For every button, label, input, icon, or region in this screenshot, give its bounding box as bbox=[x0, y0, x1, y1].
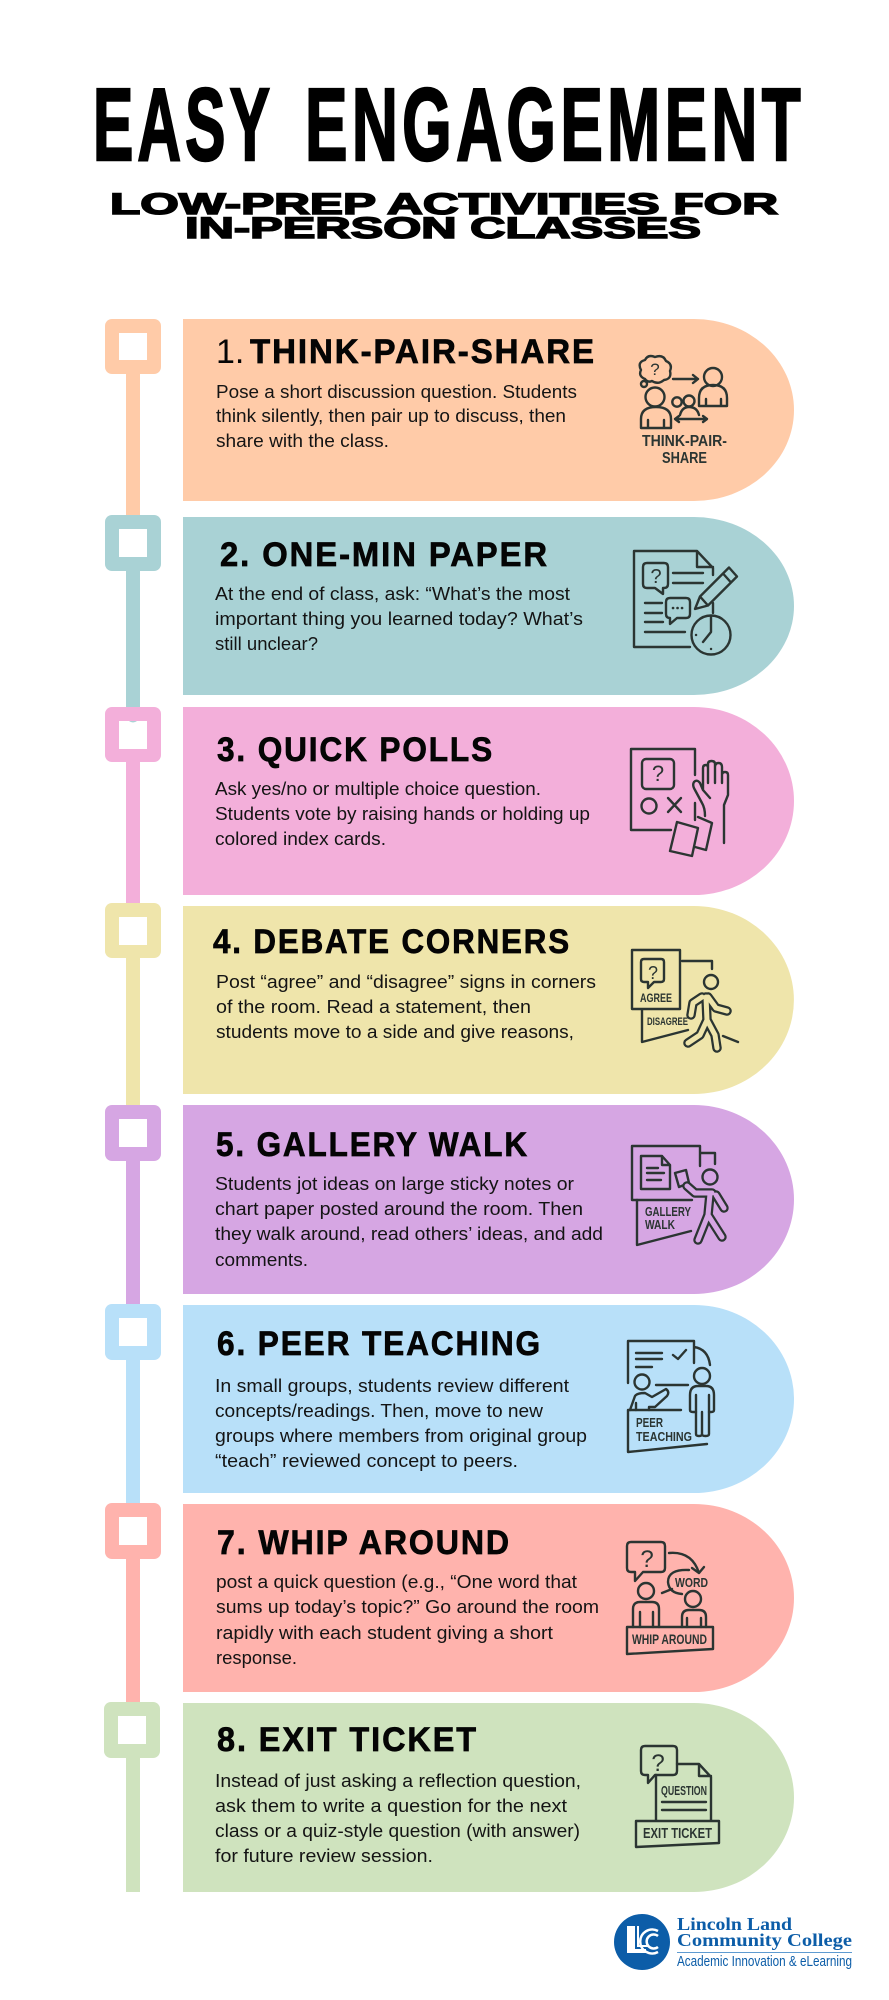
heading: 4. DEBATE CORNERS bbox=[213, 923, 571, 961]
icon: agree disagree signs with walker: AGREE bbox=[640, 991, 672, 1005]
college name: Lincoln Land bbox=[677, 1914, 792, 1934]
timeline node 4 bbox=[105, 903, 161, 1108]
timeline node 6 bbox=[105, 1304, 161, 1506]
heading: 8. EXIT TICKET bbox=[217, 1721, 478, 1759]
description: important thing you learned today? What’s bbox=[215, 608, 583, 629]
icon: gallery walk: WALK bbox=[645, 1217, 675, 1232]
icon: gallery walk bbox=[632, 1146, 724, 1245]
description: concepts/readings. Then, move to new bbox=[215, 1400, 544, 1421]
title: EASY bbox=[93, 67, 274, 182]
logo mark bbox=[614, 1914, 670, 1970]
description: comments. bbox=[215, 1249, 308, 1270]
description: students move to a side and give reasons, bbox=[216, 1021, 574, 1042]
timeline node 8 bbox=[104, 1702, 160, 1892]
heading: 7. WHIP AROUND bbox=[217, 1524, 511, 1562]
panel background bbox=[183, 906, 794, 1094]
title bbox=[93, 67, 805, 182]
description: Students vote by raising hands or holding up bbox=[215, 803, 590, 824]
department name: Academic Innovation & eLearning bbox=[677, 1954, 852, 1970]
panel 7: whip around bbox=[183, 1504, 794, 1692]
description: At the end of class, ask: “What’s the most bbox=[215, 583, 570, 604]
subtitle: LOW-PREP ACTIVITIES FOR bbox=[110, 188, 779, 221]
icon: voting hand and cards bbox=[631, 749, 728, 856]
description: Instead of just asking a reflection question, bbox=[215, 1770, 581, 1791]
description: sums up today’s topic?” Go around the room bbox=[216, 1596, 599, 1617]
description bbox=[216, 1571, 599, 1668]
description: ask them to write a question for the next bbox=[215, 1795, 567, 1816]
panel background bbox=[183, 1305, 794, 1493]
description: “teach” reviewed concept to peers. bbox=[215, 1450, 518, 1471]
icon: agree disagree signs with walker: DISAGREE bbox=[647, 1016, 688, 1028]
description: Ask yes/no or multiple choice question. bbox=[215, 778, 541, 799]
icon: paper with pencil and clock bbox=[634, 551, 737, 654]
heading: 3. QUICK POLLS bbox=[217, 731, 494, 769]
description: colored index cards. bbox=[215, 828, 386, 849]
panel background bbox=[183, 1703, 794, 1892]
icon: paper with pencil and clock: ? bbox=[650, 566, 662, 588]
subtitle: IN-PERSON CLASSES bbox=[185, 212, 701, 245]
icon: think-pair-share: THINK-PAIR- bbox=[642, 433, 727, 450]
timeline node 1 bbox=[105, 319, 161, 518]
icon: agree disagree signs with walker bbox=[632, 950, 738, 1048]
panel 6: peer teaching bbox=[183, 1305, 794, 1493]
heading text: THINK-PAIR-SHARE bbox=[250, 333, 596, 371]
description bbox=[215, 1770, 581, 1866]
description: rapidly with each student giving a short bbox=[216, 1622, 553, 1643]
description: In small groups, students review different bbox=[215, 1375, 569, 1396]
panel 8: exit ticket bbox=[183, 1703, 794, 1892]
icon: voting hand and cards: ? bbox=[652, 761, 664, 786]
description: for future review session. bbox=[215, 1845, 433, 1866]
description bbox=[215, 1375, 587, 1471]
timeline node 2 bbox=[105, 515, 161, 714]
description: response. bbox=[216, 1647, 297, 1668]
icon: think-pair-share: ? bbox=[650, 360, 660, 379]
description bbox=[216, 381, 577, 451]
panel background bbox=[183, 707, 794, 895]
icon: gallery walk: GALLERY bbox=[645, 1204, 691, 1219]
timeline node 7 bbox=[105, 1503, 161, 1705]
description: they walk around, read others’ ideas, and add bbox=[215, 1223, 603, 1244]
icon: whip around: WORD bbox=[675, 1575, 708, 1590]
logo: Lincoln Land Community College bbox=[614, 1914, 852, 1970]
description: chart paper posted around the room. Then bbox=[215, 1198, 583, 1219]
timeline node 5 bbox=[105, 1105, 161, 1307]
heading: 2. ONE-MIN PAPER bbox=[220, 536, 549, 574]
timeline node 3 bbox=[105, 707, 161, 906]
panel 5: gallery walk bbox=[183, 1105, 794, 1294]
panel background bbox=[183, 319, 794, 501]
icon: exit ticket: ? bbox=[651, 1750, 665, 1777]
panel 3: quick polls bbox=[183, 707, 794, 895]
description bbox=[215, 1173, 603, 1270]
panel background bbox=[183, 517, 794, 695]
panel 4: debate corners bbox=[183, 906, 794, 1094]
icon: peer teaching: TEACHING bbox=[636, 1429, 692, 1444]
description: groups where members from original group bbox=[215, 1425, 587, 1446]
icon: think-pair-share: SHARE bbox=[662, 450, 707, 467]
panel 1: think-pair-share bbox=[183, 319, 794, 501]
description bbox=[215, 778, 590, 849]
subtitle bbox=[110, 188, 779, 245]
icon: whip around: ? bbox=[640, 1546, 654, 1573]
description: post a quick question (e.g., “One word that bbox=[216, 1571, 577, 1592]
icon: agree disagree signs with walker: ? bbox=[648, 963, 658, 983]
icon: exit ticket bbox=[636, 1746, 719, 1847]
icon: exit ticket: QUESTION bbox=[661, 1783, 707, 1798]
icon: think-pair-share bbox=[640, 356, 727, 467]
icon: whip around: WHIP AROUND bbox=[632, 1631, 707, 1647]
icon: exit ticket: EXIT TICKET bbox=[643, 1825, 712, 1842]
panel background bbox=[183, 1105, 794, 1294]
logo: Lincoln Land Community College: Community College bbox=[677, 1930, 852, 1950]
icon: peer teaching: PEER bbox=[636, 1415, 663, 1430]
description bbox=[216, 971, 596, 1042]
description: Pose a short discussion question. Students bbox=[216, 381, 577, 402]
description: still unclear? bbox=[215, 633, 318, 654]
heading: 6. PEER TEACHING bbox=[217, 1325, 542, 1363]
panel 2: one-min paper bbox=[183, 517, 794, 695]
description: class or a quiz-style question (with answer) bbox=[215, 1820, 580, 1841]
icon: whip around bbox=[627, 1542, 713, 1654]
description: think silently, then pair up to discuss, then bbox=[216, 405, 566, 426]
description: share with the class. bbox=[216, 430, 389, 451]
description: Post “agree” and “disagree” signs in corners bbox=[216, 971, 596, 992]
panel background bbox=[183, 1504, 794, 1692]
description: of the room. Read a statement, then bbox=[216, 996, 531, 1017]
heading: 5. GALLERY WALK bbox=[216, 1126, 529, 1164]
heading number: 1. bbox=[216, 333, 244, 371]
icon: peer teaching bbox=[628, 1341, 714, 1452]
description bbox=[215, 583, 583, 654]
description: Students jot ideas on large sticky notes or bbox=[215, 1173, 574, 1194]
